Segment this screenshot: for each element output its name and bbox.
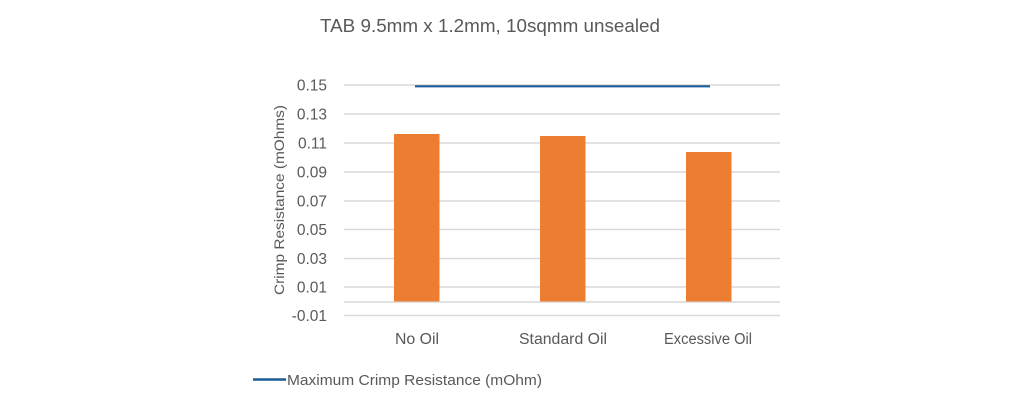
y-axis labels — [292, 78, 327, 325]
maximum resistance line — [415, 85, 710, 87]
x-axis labels: Excessive Oil — [664, 331, 752, 348]
y-axis labels: 0.09 — [297, 164, 327, 182]
y-axis labels: 0.11 — [298, 136, 327, 152]
bar: No Oil — [394, 134, 440, 302]
y-axis labels: -0.01 — [292, 308, 327, 325]
legend: Maximum Crimp Resistance (mOhm) — [287, 373, 542, 389]
title: TAB 9.5mm x 1.2mm, 10sqmm unsealed — [320, 16, 660, 36]
y-axis labels: 0.07 — [297, 194, 327, 210]
y-axis labels: 0.01 — [297, 280, 327, 296]
bar: Excessive Oil — [686, 152, 732, 302]
x-axis labels: No Oil — [395, 331, 439, 348]
y-axis labels: 0.03 — [297, 251, 327, 268]
y-axis labels: 0.13 — [297, 106, 327, 124]
bar: Standard Oil — [540, 136, 586, 302]
x-axis labels: Standard Oil — [519, 331, 607, 348]
x-axis labels — [395, 331, 752, 348]
y-axis labels: 0.05 — [297, 222, 327, 239]
bar chart — [394, 134, 732, 302]
y-axis labels: 0.15 — [297, 78, 327, 94]
y-axis title: Crimp Resistance (mOhms) — [271, 105, 287, 295]
